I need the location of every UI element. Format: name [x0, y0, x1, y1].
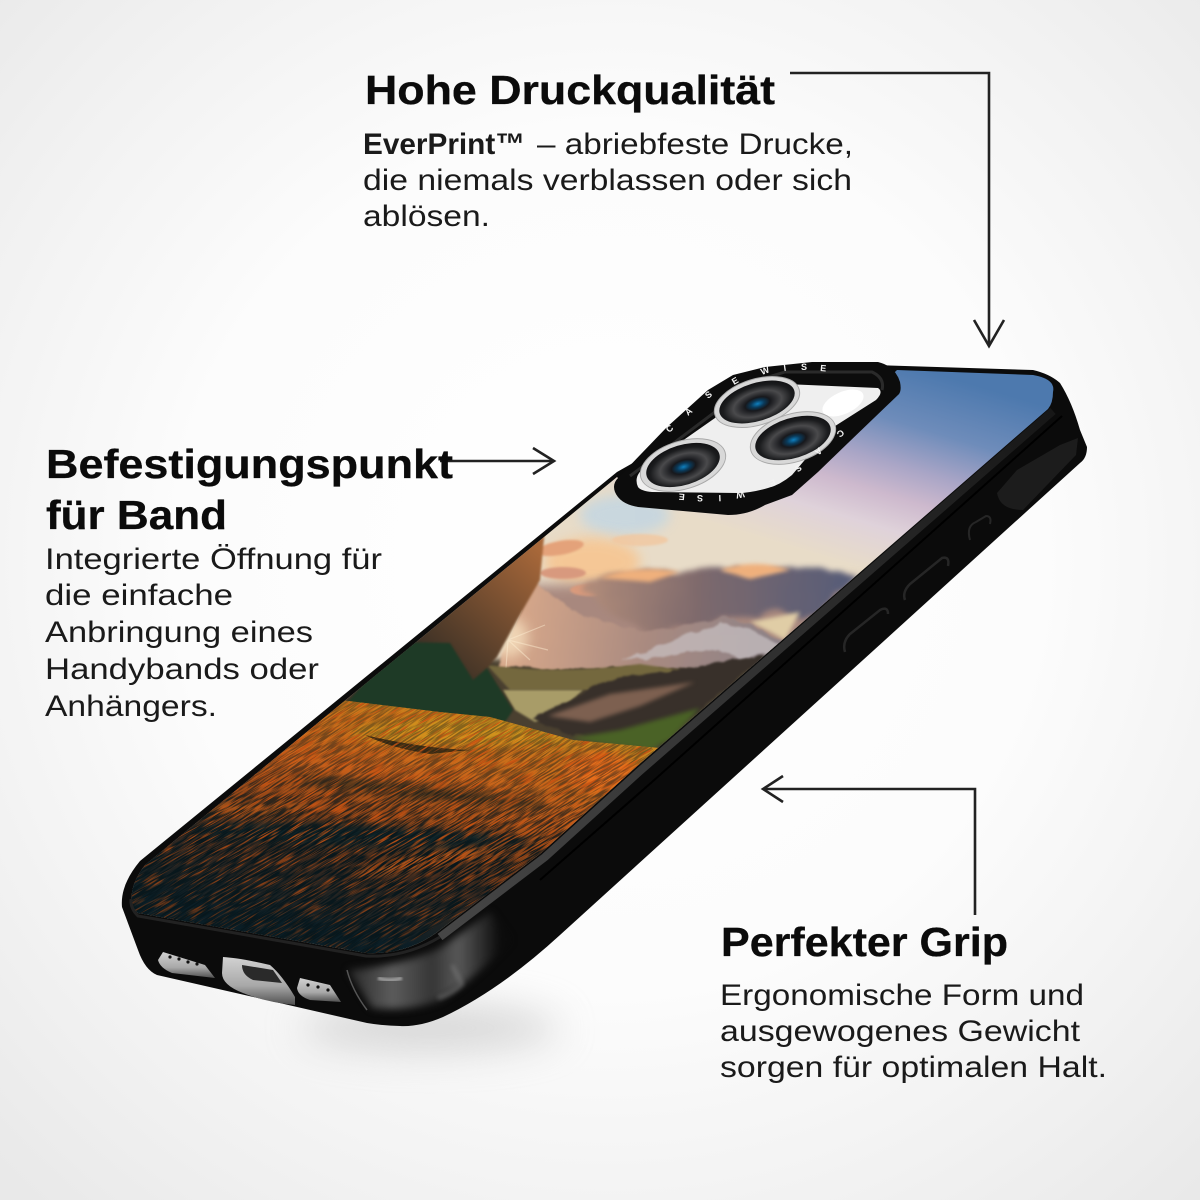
right hill	[532, 655, 767, 745]
forest	[348, 642, 514, 722]
flash	[818, 384, 868, 422]
mauve backing	[500, 580, 860, 670]
field base	[132, 700, 658, 954]
arrow: print quality	[790, 73, 1004, 346]
text: print quality	[363, 128, 853, 233]
side groove	[540, 416, 1062, 880]
right speaker	[297, 978, 341, 1002]
sun rays	[506, 610, 548, 668]
glossy bumper corner	[347, 912, 510, 1010]
volume down button	[844, 609, 888, 652]
volume up button	[904, 558, 948, 600]
golden highlight	[350, 718, 590, 746]
text: print quality: EverPrint™	[363, 128, 525, 161]
field shadow stripe	[365, 735, 470, 754]
rim around artwork	[131, 411, 1062, 956]
text: grip	[720, 979, 1107, 1084]
storm clouds	[580, 568, 858, 632]
lens top	[708, 367, 806, 437]
text: print quality: ablösen.	[363, 200, 490, 233]
cloud sunset highlight	[600, 564, 790, 582]
arrow: strap point	[440, 448, 554, 474]
action button	[969, 516, 990, 540]
grass streaks orange	[132, 701, 651, 953]
text: strap point	[45, 543, 382, 723]
text: grip: Ergonomische Form und	[720, 979, 1084, 1012]
text: strap point: Integrierte Öffnung für	[45, 543, 382, 576]
lens left	[634, 429, 732, 501]
lens right	[744, 402, 842, 474]
charging port	[222, 957, 295, 1005]
bevel lower right	[440, 411, 1053, 937]
text: strap point: Anhängers.	[45, 690, 217, 723]
grass streaks dark	[132, 700, 654, 954]
bright cloud gap	[750, 612, 800, 640]
inner ridge	[630, 372, 883, 476]
text: strap point: Handybands oder	[45, 653, 319, 686]
heading: print quality: Hohe Druckqualität	[365, 67, 775, 113]
text: print quality: die niemals verblassen oder sich	[363, 164, 852, 197]
case body	[122, 363, 1087, 1026]
camera ring	[614, 362, 901, 515]
olive hills	[487, 664, 680, 690]
grass field	[132, 700, 658, 954]
heading: strap point	[46, 441, 453, 538]
dark grass bands	[170, 772, 550, 881]
brand text upper: CASEWISE	[664, 362, 827, 435]
camera window	[637, 384, 881, 493]
lake	[503, 690, 583, 722]
pale blue haze	[580, 495, 670, 535]
text: strap point: die einfache	[45, 579, 233, 612]
mountains	[497, 580, 790, 668]
sky	[120, 360, 1070, 960]
bevel bottom	[131, 899, 440, 956]
sun glow	[488, 617, 528, 657]
camera module	[614, 362, 901, 515]
hill lit ridge	[548, 682, 695, 722]
cliff	[332, 536, 546, 711]
text: grip: ausgewogenes Gewicht	[720, 1015, 1081, 1048]
green foliage	[570, 708, 700, 750]
distant warm glow	[544, 538, 640, 586]
heading: strap point: Befestigungspunkt	[46, 441, 453, 487]
arrow: grip	[763, 776, 975, 915]
bright orange patch	[562, 752, 634, 792]
landscape backing	[486, 648, 774, 757]
brand text lower: CASEWISE	[678, 427, 846, 503]
text: print quality: – abriebfeste Drucke,	[537, 128, 853, 161]
phone back artwork	[132, 370, 1054, 954]
text: grip: sorgen für optimalen Halt.	[720, 1051, 1107, 1084]
heading: grip: Perfekter Grip	[721, 919, 1008, 965]
phone shadow	[300, 1006, 560, 1050]
phone case	[122, 363, 1087, 1026]
snow ridge	[620, 622, 785, 660]
mute switch oval	[997, 438, 1078, 510]
heading: strap point: für Band	[46, 492, 227, 538]
peach clouds	[535, 534, 668, 596]
left speaker	[158, 952, 215, 978]
text: strap point: Anbringung eines	[45, 616, 313, 649]
